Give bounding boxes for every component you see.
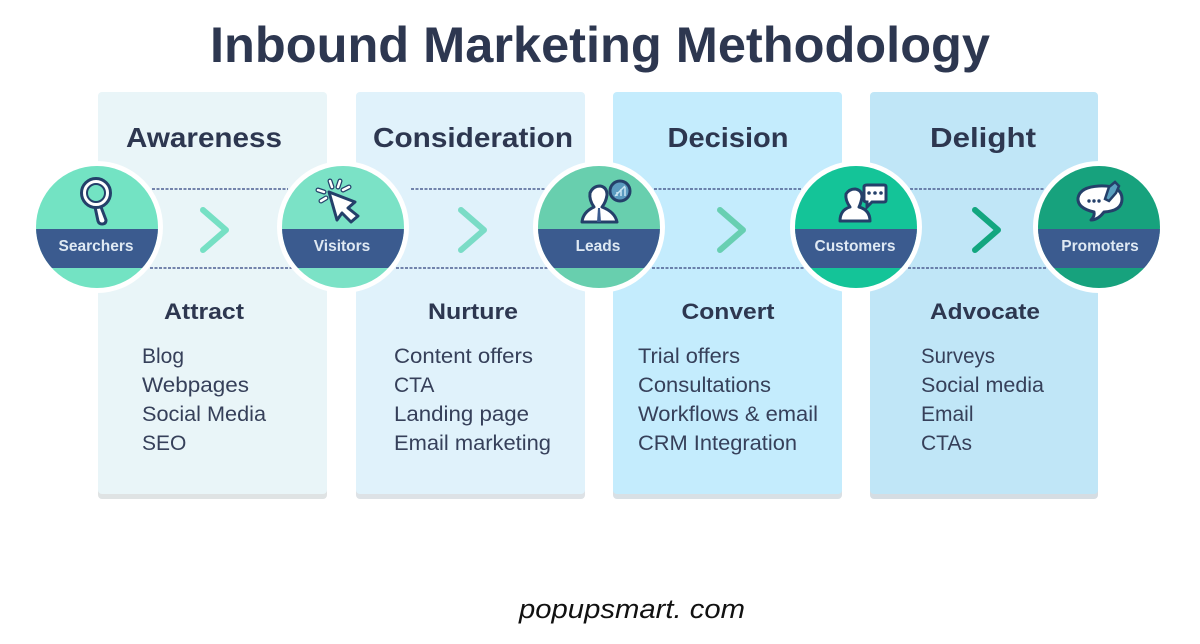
heading: attract: Attract xyxy=(164,299,245,324)
list: convert: Consultations xyxy=(638,374,771,397)
list: attract xyxy=(142,345,266,455)
icon: business person xyxy=(582,181,630,222)
list: convert: Trial offers xyxy=(638,345,740,368)
arrow 1 xyxy=(203,210,226,250)
panel: consideration xyxy=(356,92,585,499)
list: advocate: Social media xyxy=(921,374,1044,397)
heading: delight: Delight xyxy=(930,122,1036,153)
node: leads: Leads xyxy=(576,238,620,255)
node: customers: Customers xyxy=(815,238,895,255)
node: promoters xyxy=(1033,161,1168,293)
heading: awareness: Awareness xyxy=(126,122,282,153)
list: nurture: Content offers xyxy=(394,345,533,368)
node: searchers: Searchers xyxy=(59,238,133,255)
heading: advocate: Advocate xyxy=(930,299,1040,324)
node: visitors: Visitors xyxy=(314,238,370,255)
list: advocate: CTAs xyxy=(921,432,972,455)
node: promoters: Promoters xyxy=(1061,238,1139,255)
heading: consideration: Consideration xyxy=(373,122,573,153)
list: convert xyxy=(638,345,818,455)
list: nurture xyxy=(394,345,551,455)
list: attract: SEO xyxy=(142,432,186,455)
list: advocate: Surveys xyxy=(921,345,995,368)
panel: awareness xyxy=(98,92,327,499)
list: convert: CRM Integration xyxy=(638,432,797,455)
list: nurture: Email marketing xyxy=(394,432,551,455)
title: Inbound Marketing Methodology xyxy=(210,17,990,73)
list: advocate xyxy=(921,345,1044,455)
panel: decision xyxy=(613,92,842,499)
arrow 2 xyxy=(461,210,484,250)
list: attract: Blog xyxy=(142,345,184,368)
icon: magnifier xyxy=(82,178,110,224)
heading: convert: Convert xyxy=(682,299,775,324)
heading: decision: Decision xyxy=(668,122,788,153)
node: leads xyxy=(533,161,668,293)
icon: speech with pen xyxy=(1078,182,1122,220)
arrow 4 xyxy=(975,210,998,250)
footer source: popupsmart. com xyxy=(518,594,745,624)
node: searchers xyxy=(30,161,164,293)
list: attract: Social Media xyxy=(142,403,266,426)
list: nurture: Landing page xyxy=(394,403,529,426)
panel: delight xyxy=(870,92,1098,499)
list: advocate: Email xyxy=(921,403,974,426)
node: visitors xyxy=(277,161,412,293)
heading: nurture: Nurture xyxy=(428,299,518,324)
icon: customer speech xyxy=(840,185,886,221)
icon: cursor click xyxy=(318,181,358,222)
arrow 3 xyxy=(720,210,743,250)
list: attract: Webpages xyxy=(142,374,249,397)
list: nurture: CTA xyxy=(394,374,434,397)
list: convert: Workflows & email xyxy=(638,403,818,426)
node: customers xyxy=(790,161,924,293)
